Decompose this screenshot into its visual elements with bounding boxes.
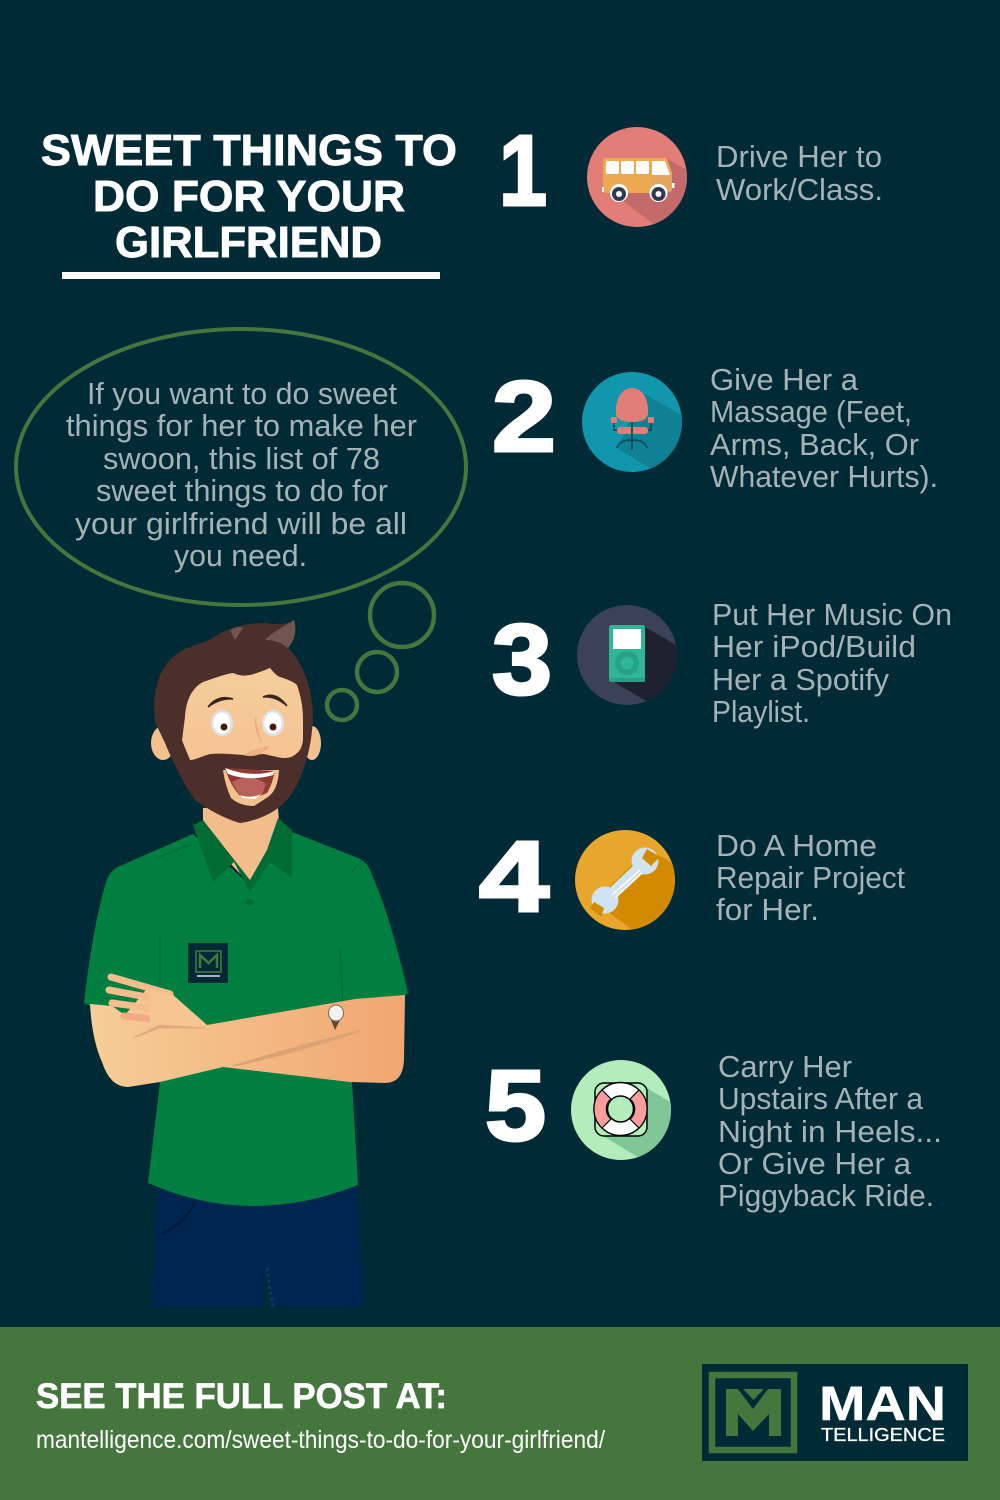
icon: lifebuoy <box>571 1060 671 1160</box>
footer url: mantelligence.com/sweet-things-to-do-for-your-girlfriend/ <box>36 1426 605 1454</box>
item 1: number, bus icon, text: 1 <box>499 115 547 227</box>
item 4: number, wrench icon, text: Do A Home <box>716 828 877 863</box>
item 4: number, wrench icon, text <box>479 830 905 930</box>
title <box>41 126 457 279</box>
item 4: number, wrench icon, text: Repair Project <box>716 860 905 895</box>
title: GIRLFRIEND <box>115 218 382 267</box>
item 1: number, bus icon, text: Drive Her to <box>716 139 882 174</box>
item 5: number, lifebuoy icon, text: 5 <box>485 1050 546 1162</box>
item 3: number, music player icon, text: 3 <box>492 604 552 716</box>
item 2: number, chair icon, text: Arms, Back, Or <box>710 427 919 462</box>
item 4: number, wrench icon, text: for Her. <box>716 892 819 927</box>
crossed arms <box>90 977 405 1087</box>
icon: music player <box>577 605 677 705</box>
footer call to action: SEE THE FULL POST AT: <box>36 1377 447 1416</box>
item 3: number, music player icon, text <box>492 597 952 729</box>
item 2: number, chair icon, text <box>492 361 938 494</box>
item 5: number, lifebuoy icon, text <box>485 1049 942 1213</box>
icon: wrench <box>575 830 675 930</box>
item 5: number, lifebuoy icon, text: Upstairs After a <box>718 1081 924 1116</box>
thought bubble: things for her to make her <box>66 408 417 443</box>
neck <box>203 808 281 884</box>
item 5: number, lifebuoy icon, text: Piggyback Ride. <box>718 1178 934 1213</box>
wristwatch <box>328 1005 344 1030</box>
logo: Mantelligence: MAN <box>819 1378 946 1431</box>
item 2: number, chair icon, text: Give Her a <box>710 362 859 397</box>
logo: Mantelligence <box>702 1364 968 1461</box>
illustration: bearded man in green polo <box>84 620 408 1307</box>
item 2: number, chair icon, text: Massage (Feet, <box>710 394 912 429</box>
logo: Mantelligence: TELLIGENCE <box>821 1425 945 1445</box>
thought bubble: swoon, this list of 78 <box>103 441 380 476</box>
item 2: number, chair icon, text: 2 <box>492 361 556 473</box>
item 2: number, chair icon, text: Whatever Hurts). <box>710 459 938 494</box>
icon: bus <box>587 127 687 227</box>
item 1: number, bus icon, text: Work/Class. <box>716 172 883 207</box>
thought bubble <box>16 329 466 720</box>
item 3: number, music player icon, text: Put Her Music On <box>712 597 952 632</box>
item 5: number, lifebuoy icon, text: Carry Her <box>718 1049 852 1084</box>
item 3: number, music player icon, text: Playlist. <box>712 694 810 729</box>
item 5: number, lifebuoy icon, text: Night in Heels... <box>718 1114 942 1149</box>
title: SWEET THINGS TO <box>41 126 457 175</box>
thought bubble: your girlfriend will be all <box>75 506 407 541</box>
item 3: number, music player icon, text: Her a Spotify <box>712 662 889 697</box>
item 5: number, lifebuoy icon, text: Or Give Her a <box>718 1146 912 1181</box>
polo shirt <box>84 818 408 1206</box>
title: DO FOR YOUR <box>93 172 405 221</box>
item 1: number, bus icon, text <box>503 127 881 227</box>
thought bubble: you need. <box>174 538 307 573</box>
item 4: number, wrench icon, text: 4 <box>479 821 549 933</box>
shirt badge logo <box>188 943 228 983</box>
thought bubble: sweet things to do for <box>96 473 388 508</box>
footer band <box>0 1327 1000 1500</box>
trousers <box>152 1185 365 1307</box>
thought bubble: If you want to do sweet <box>87 376 397 411</box>
icon: office chair <box>582 372 682 472</box>
item 3: number, music player icon, text: Her iPod/Build <box>712 629 916 664</box>
head <box>151 620 321 823</box>
